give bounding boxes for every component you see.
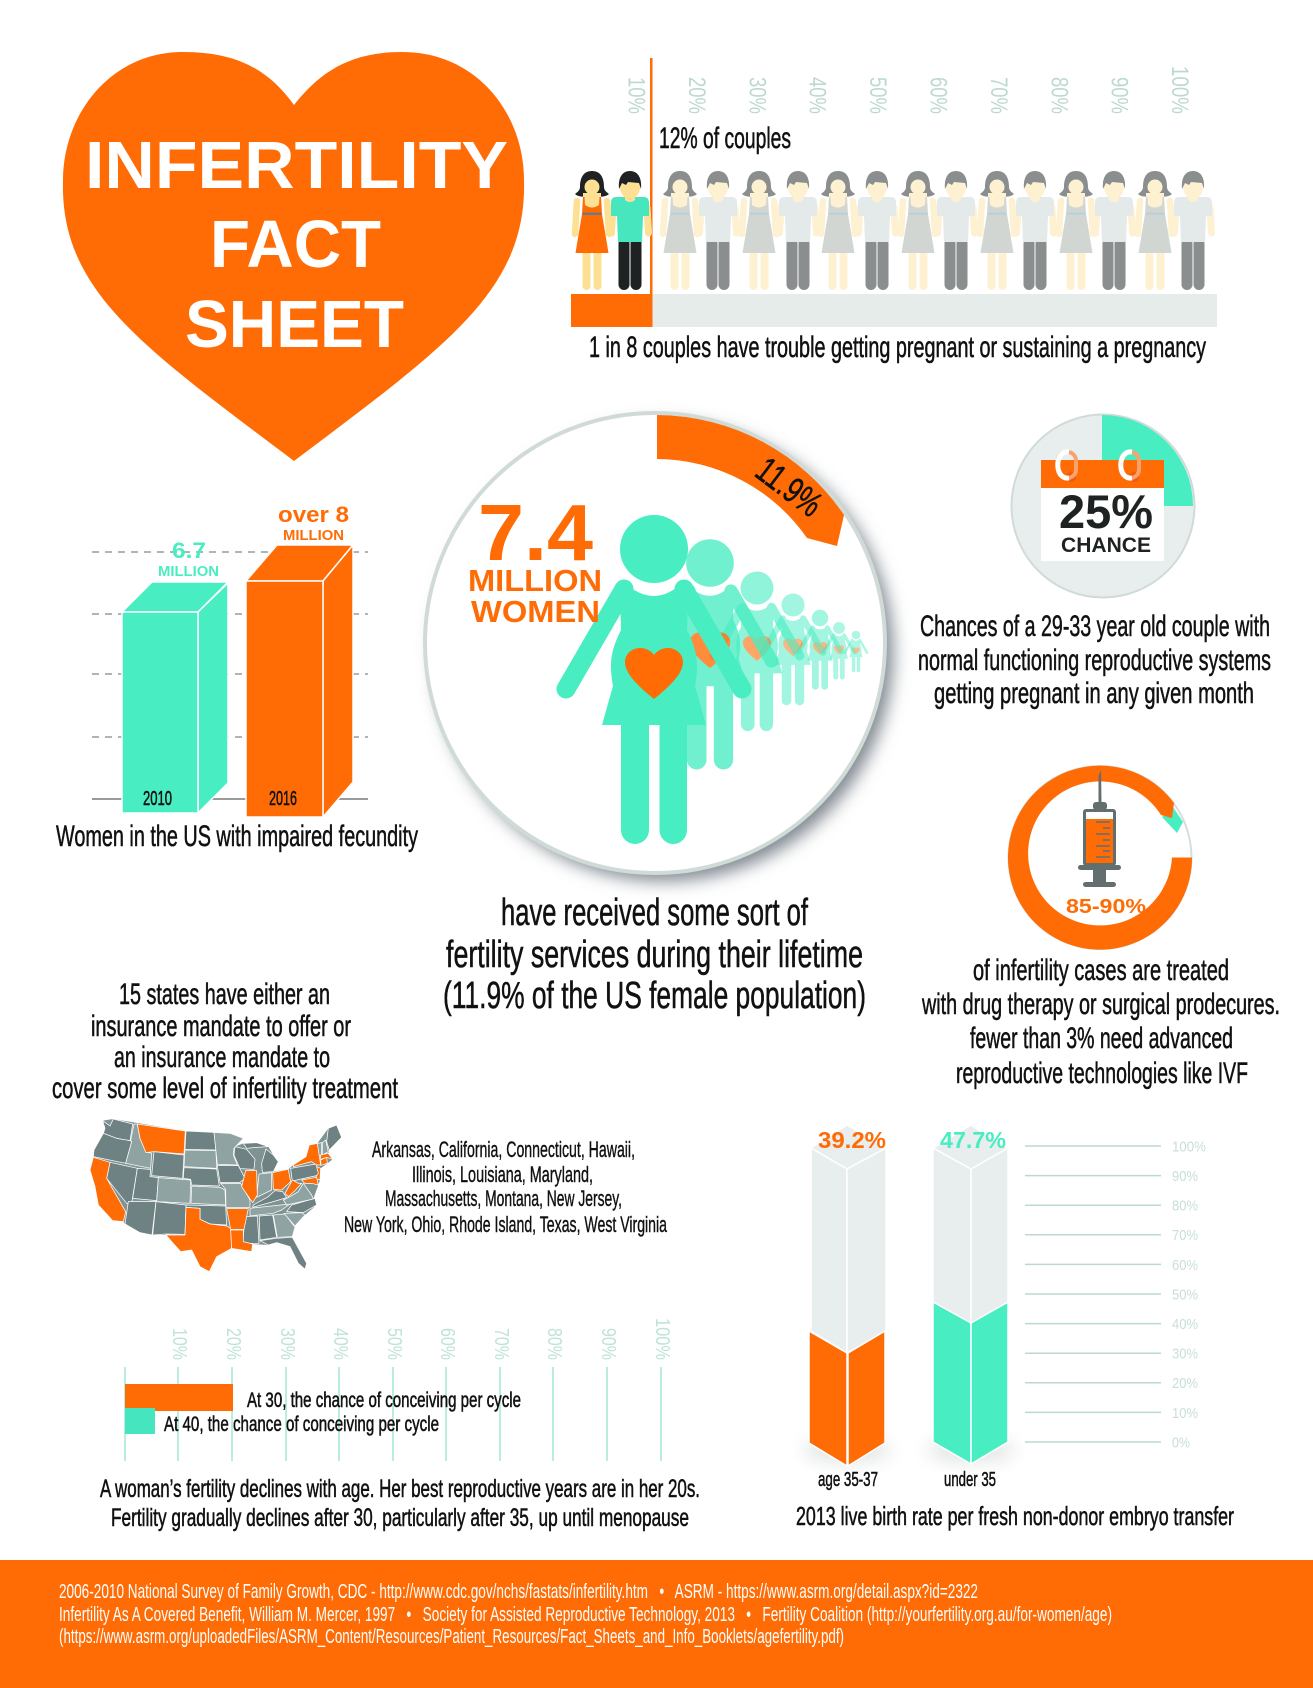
main pregnant woman figure [566,515,742,844]
text: fertility services: fertility services during their lifetime [446,934,863,976]
scale labels [168,1318,673,1360]
85-90% label: 85-90% [1066,896,1146,918]
outer ring [1008,766,1192,949]
calendar icon [1041,452,1164,561]
7.4 million women: MILLION [468,563,602,598]
text: treatment [921,954,1280,1090]
scale labels: 20% [222,1328,244,1360]
title [85,128,508,362]
bar labels: At 30, the chance of conceiving per cycle [247,1389,521,1412]
text: insurance mandate: cover some level of infertility treatment [52,1072,398,1105]
bar 2010 [122,582,228,813]
7.4 million women: 7.4 [478,488,594,577]
US map [90,1119,342,1272]
text: fertility services: (11.9% of the US female population) [443,975,866,1017]
percent scale labels: 100% [1166,66,1193,114]
text: insurance mandate: an insurance mandate to [114,1041,330,1074]
percent scale labels: 30% [744,77,770,114]
faded couples [663,171,1212,290]
text: insurance mandate: insurance mandate to offer or [91,1010,351,1043]
text: state list: New York, Ohio, Rhode Island, Texas, West Virginia [344,1212,667,1237]
percent scale labels: 70% [985,77,1012,114]
column age 35-37 [809,1125,886,1466]
scale labels: 60% [436,1328,458,1360]
percent scale labels: 90% [1106,77,1132,114]
scale labels: 70% [490,1328,512,1360]
panel: impaired fecundity bar chart [56,502,418,853]
scale labels: 30% [276,1328,298,1360]
value labels [818,1127,1006,1153]
percent scale labels: 20% [683,77,710,114]
panel: 25% chance [918,414,1271,710]
year labels [143,788,297,810]
text: state list: Illinois, Louisiana, Maryland, [412,1162,593,1187]
25% chance label: CHANCE [1061,534,1151,557]
percent scale labels: 60% [924,77,952,114]
arc 11.9% [657,415,844,546]
bar labels [164,1389,521,1436]
bar labels: At 40, the chance of conceiving per cycle [164,1413,439,1436]
panel: 7.4 million women circle [425,413,893,881]
label over 8 million: MILLION [283,528,344,544]
bar 2016 [246,545,353,817]
scale labels: 100% [1172,1138,1206,1156]
column labels: under 35 [944,1469,996,1491]
7.4 million women: WOMEN [471,594,600,629]
circle [425,413,885,873]
value labels: 39.2% [818,1127,886,1153]
title: SHEET [185,287,404,362]
percent scale labels: 80% [1046,77,1072,114]
footer sources [0,1560,1313,1688]
12% label: 12% of couples [659,122,791,155]
scale labels: 10% [1172,1405,1198,1422]
circle shadow [435,423,893,881]
percent scale labels [622,66,1193,114]
scale labels: 20% [1172,1375,1198,1392]
scale labels: 90% [597,1328,619,1360]
arc label: 11.9% [748,449,830,525]
text: fertility services [443,892,866,1017]
scale labels: 0% [1172,1434,1190,1452]
orange ring [1008,766,1192,950]
teal tip [1162,807,1183,833]
bar at 40 [125,1408,155,1434]
scale labels: 30% [1172,1346,1198,1362]
caption: Fertility gradually declines after 30, particularly after 35, up until menopause [111,1504,689,1532]
text: state list: Arkansas, California, Connecticut, Hawaii, [372,1137,635,1162]
column under 35 [933,1125,1008,1464]
25% chance label: 25% [1059,485,1153,538]
panel: live birth rate chart [796,1125,1234,1531]
year labels: 2010 [143,788,172,810]
column shadows [803,1438,891,1462]
percent scale labels: 10% [622,77,650,114]
scale lines [1025,1146,1161,1442]
text: insurance mandate [52,978,398,1105]
label 6.7 million [158,538,219,580]
pie quarter [1102,415,1193,506]
bar at 30 [125,1384,233,1411]
text: state list [344,1137,667,1237]
caption [100,1475,700,1532]
column labels: age 35-37 [818,1469,878,1491]
year labels: 2016 [269,788,297,810]
pie background [1012,414,1194,598]
column labels [818,1469,996,1491]
scale lines [125,1367,661,1461]
highlighted couple [575,171,649,290]
scale labels: 60% [1172,1257,1198,1274]
scale labels: 80% [543,1328,565,1360]
grid lines [92,552,368,799]
scale labels: 50% [383,1328,405,1360]
title: INFERTILITY [85,128,508,203]
scale labels: 40% [329,1328,351,1360]
title: FACT [210,207,381,282]
text: fertility services: have received some sort of [501,892,808,934]
heart title panel [63,52,524,461]
text: state list: Massachusetts, Montana, New Jersey, [385,1186,622,1211]
scale labels [1172,1138,1206,1452]
trailing women figures [648,539,867,770]
scale labels: 70% [1172,1227,1198,1244]
text: insurance mandate: 15 states have either an [119,978,330,1011]
text: chances [918,610,1271,710]
panel: 1 in 8 couples [571,58,1217,364]
syringe icon [1078,770,1121,887]
label 6.7 million: MILLION [158,564,219,580]
panel: age fertility chart [100,1318,700,1532]
percent scale labels: 40% [804,77,830,114]
percent scale labels: 50% [864,77,891,114]
bar fill 12% [571,294,651,327]
footer sources: (https://www.asrm.org/uploadedFiles/ASRM_Content/Resources/Patient_Resources/Fact_Sheets_and_Info_Booklets/agefertility.pdf) [59,1626,844,1648]
label over 8 million [278,502,349,544]
7.4 million women [468,488,602,629]
scale labels: 50% [1172,1286,1198,1304]
scale labels: 100% [651,1318,673,1360]
bar track [651,294,1217,327]
scale labels: 90% [1172,1168,1198,1185]
marker line [650,58,652,327]
value labels: 47.7% [940,1127,1006,1153]
scale labels: 40% [1172,1316,1198,1333]
caption: A woman’s fertility declines with age. Her best reproductive years are in her 20s. [100,1475,700,1503]
label over 8 million: over 8 [278,502,349,527]
scale labels: 80% [1172,1198,1198,1214]
panel: 85-90% syringe [921,766,1280,1090]
label 6.7 million: 6.7 [172,538,206,563]
caption: Women in the US with impaired fecundity [56,820,418,853]
scale labels: 10% [168,1328,190,1360]
